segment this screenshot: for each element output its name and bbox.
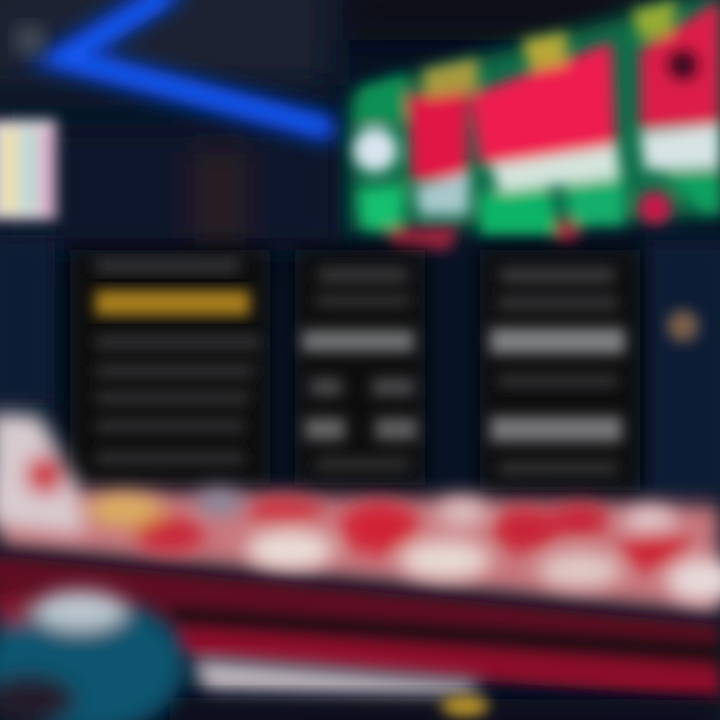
left navy panel <box>0 235 55 405</box>
right navy panel <box>645 240 720 500</box>
body lines <box>95 335 260 464</box>
ceiling light <box>16 26 44 54</box>
mosaic video wall <box>350 0 720 250</box>
white floor <box>190 658 480 702</box>
checkered red and white band <box>0 412 720 612</box>
ceiling <box>0 0 640 250</box>
panel: middle text column <box>295 250 425 485</box>
panel: left text column <box>70 250 270 485</box>
teal blob <box>0 590 185 720</box>
yellow heading <box>95 290 250 316</box>
panel: right text column <box>480 250 640 490</box>
yellow light <box>441 695 489 717</box>
orange dot <box>667 310 699 342</box>
dark red ledge <box>0 555 720 700</box>
neon blue lines <box>62 0 325 128</box>
heading bar <box>95 258 240 274</box>
dark floor <box>170 698 720 720</box>
left striped screen <box>0 120 56 220</box>
